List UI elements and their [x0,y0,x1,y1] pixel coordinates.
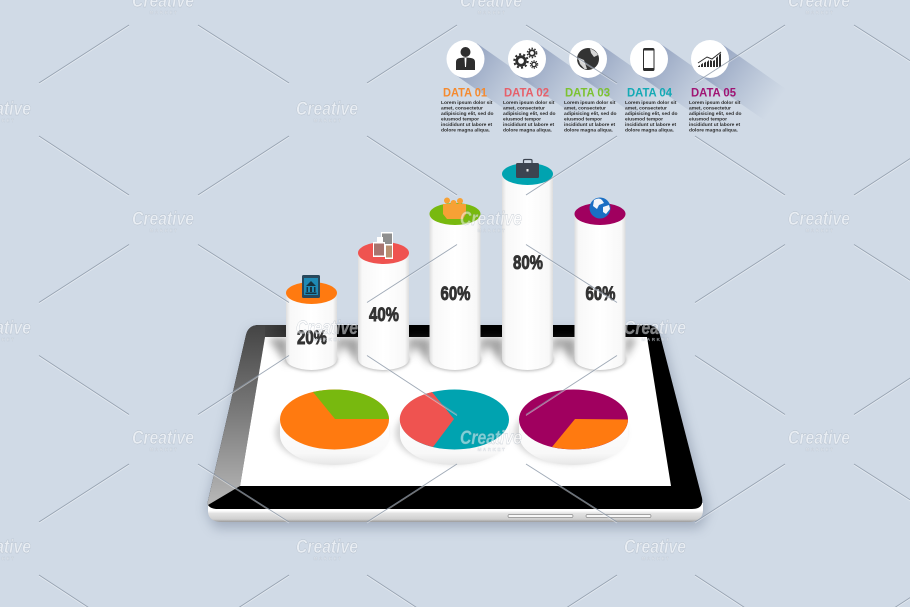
legend item 5: DATA 05 [691,88,737,100]
bar chart: cylinders [268,160,637,371]
legend item 3: incididunt ut labore et [564,122,615,128]
legend item 3 [564,40,616,133]
legend item 3: adipisicing elit, sed do [564,111,616,117]
pie 1 [275,390,389,465]
watermark logos: MARKET [478,228,506,233]
bar 20%: 20% [297,327,327,349]
legend item 5: incididunt ut labore et [689,122,740,128]
legend item 4: incididunt ut labore et [625,122,676,128]
bar 40%: 40% [369,304,399,326]
icon: gears [508,40,546,78]
legend item 4 [625,40,677,133]
legend header [441,40,786,133]
watermark logos: MARKET [314,337,342,342]
legend item 3: amet, consectetur [564,105,606,111]
icon: globe [590,198,610,218]
legend item 4: amet, consectetur [625,105,667,111]
legend item 2 [503,40,555,133]
watermark logos: Creative [296,537,358,558]
legend item 1: eiusmod tempor [441,117,479,123]
legend item 3: DATA 03 [565,88,610,100]
bar 80% [502,160,553,370]
legend item 5: eiusmod tempor [689,117,727,123]
bar 20% [286,275,337,370]
cylinder base shadows [286,349,626,371]
tablet white screen [240,337,671,486]
watermark logos: MARKET [806,10,834,15]
pie charts [275,390,628,465]
legend item 5: amet, consectetur [689,105,731,111]
icon: documents [373,232,393,259]
watermark logos: MARKET [478,10,506,15]
legend item 1: amet, consectetur [441,105,483,111]
legend item 2: amet, consectetur [503,105,545,111]
legend item 5: dolore magna aliqua. [689,127,739,133]
watermark logos: Creative [788,209,850,230]
legend item 5: Lorem ipsum dolor sit [689,100,741,106]
watermark logos: MARKET [314,556,342,561]
legend item 2: adipisicing elit, sed do [503,111,555,117]
legend item 2: DATA 02 [504,88,549,100]
icon: person [446,40,484,78]
bar 60%: 60% [440,283,470,305]
legend item 4: eiusmod tempor [625,117,663,123]
cylinder shadows [268,338,637,366]
legend item 1: adipisicing elit, sed do [441,111,493,117]
watermark logos: Creative [132,209,194,230]
tablet left bezel [208,325,265,505]
icon: phone [630,40,668,78]
legend item 4: adipisicing elit, sed do [625,111,677,117]
tablet top bezel highlight [262,325,340,337]
watermark logos: MARKET [150,228,178,233]
legend item 3: dolore magna aliqua. [564,127,614,133]
watermark logos: MARKET [150,10,178,15]
watermark logos: MARKET [642,337,670,342]
legend item 4: DATA 04 [627,88,673,100]
tablet black bezel [208,325,702,509]
watermark logos: MARKET [806,447,834,452]
bar 80%: 80% [513,252,543,274]
pie 3 [514,390,628,465]
legend item 2: Lorem ipsum dolor sit [503,100,555,106]
watermark logos: MARKET [314,118,342,123]
watermark logos: Creative [624,537,686,558]
watermark logos: MARKET [806,228,834,233]
legend item 4: Lorem ipsum dolor sit [625,100,677,106]
watermark logos: Creative [624,318,686,339]
legend item 2: dolore magna aliqua. [503,127,553,133]
icon: briefcase [516,160,539,178]
watermark logos: MARKET [150,447,178,452]
legend item 3: eiusmod tempor [564,117,602,123]
watermark logos: Creative [460,428,522,449]
legend item 1: Lorem ipsum dolor sit [441,100,493,106]
legend item 5: adipisicing elit, sed do [689,111,741,117]
long shadows [455,43,786,120]
tablet silver edge [208,503,703,522]
watermark logos: Creative [788,428,850,449]
legend item 4: dolore magna aliqua. [625,127,675,133]
legend item 2: eiusmod tempor [503,117,541,123]
watermark logos: MARKET [478,447,506,452]
watermark logos: Creative [296,318,358,339]
bar 40% [358,232,409,370]
icon: growth chart [691,40,729,78]
legend item 1 [441,40,493,133]
watermark logos: MARKET [642,556,670,561]
watermark logos: Creative [460,209,522,230]
legend item 1: dolore magna aliqua. [441,127,491,133]
bar 60% [430,198,480,370]
icon: world [569,40,607,78]
bar 60% second [574,198,626,370]
watermark logos: Creative [132,428,194,449]
bar 60% second: 60% [586,283,616,305]
tablet buttons [508,514,651,518]
icon: tablet [302,275,320,298]
pie 2 [395,390,509,465]
tablet shadow [206,330,708,528]
legend item 1: DATA 01 [443,88,488,100]
legend item 2: incididunt ut labore et [503,122,554,128]
legend item 1: incididunt ut labore et [441,122,492,128]
legend item 5 [689,40,741,133]
watermark logos: Creative [296,99,358,120]
legend item 3: Lorem ipsum dolor sit [564,100,616,106]
icon: people group [443,198,466,219]
tablet device [206,325,708,528]
